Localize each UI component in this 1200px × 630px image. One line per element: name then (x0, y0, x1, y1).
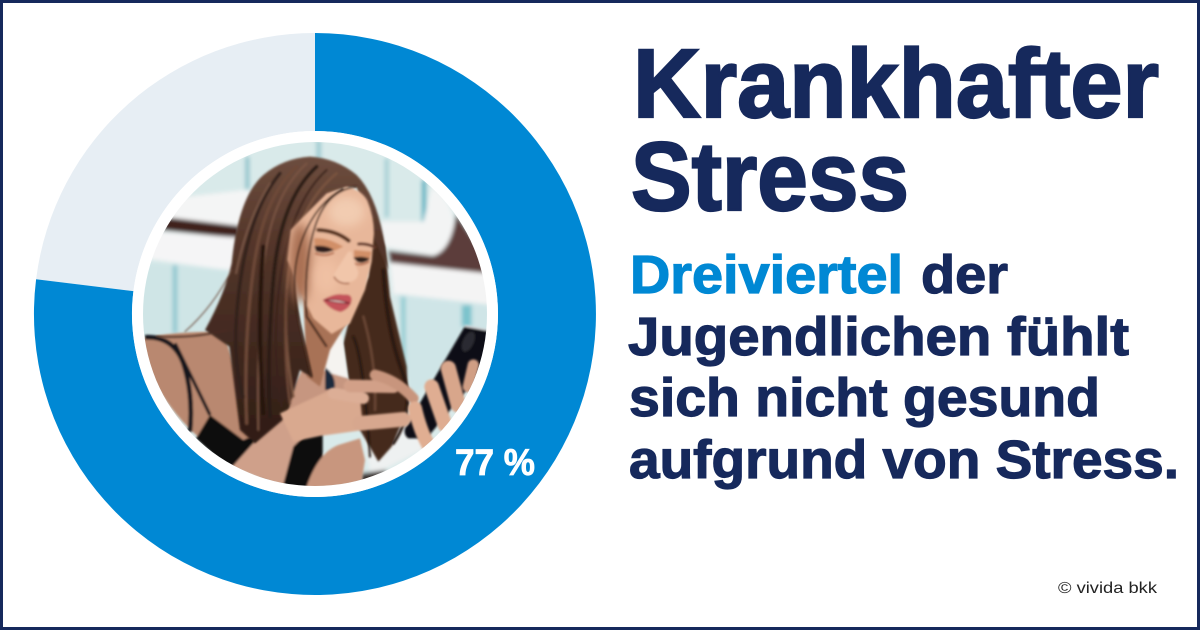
hair mass left and crown (205, 157, 388, 443)
eye shadows (314, 238, 372, 260)
cheek light (310, 268, 330, 284)
fingers of the phone hand (415, 408, 428, 445)
black top (196, 415, 323, 492)
strands across the face (294, 187, 357, 377)
left eye (314, 246, 334, 253)
blue strap (325, 367, 335, 390)
donut chart: 77 percent (34, 33, 596, 595)
title line 2: Stress (631, 122, 909, 231)
bra straps (145, 337, 191, 432)
shoulder (143, 332, 257, 440)
line 3: sich nicht gesund (629, 368, 1100, 428)
under-eye colour (315, 253, 369, 265)
face (287, 187, 375, 377)
highlighted word: Dreiviertel (630, 245, 903, 305)
mouth opening (324, 300, 350, 303)
neck shadow (303, 297, 347, 387)
line 4: aufgrund von Stress. (629, 430, 1179, 490)
left eyebrow (318, 230, 349, 241)
nostril shadow (334, 277, 349, 284)
donut segment: 77 percent (34, 33, 596, 595)
right eyebrow (359, 244, 375, 247)
right eye (353, 257, 370, 263)
forehead light (328, 197, 365, 227)
title line 1: Krankhafter (633, 29, 1159, 138)
nose (333, 252, 358, 283)
photo background: building facade (143, 142, 487, 486)
palm (280, 390, 363, 442)
photo: stressed young woman looking at smartphone (143, 142, 487, 486)
chest (288, 370, 349, 410)
line 2: Jugendlichen fühlt (628, 307, 1129, 367)
forearm (232, 422, 304, 484)
face shape (287, 187, 374, 334)
phone camera (460, 330, 476, 353)
line 1 remainder: der (921, 245, 1008, 305)
smartphone (405, 326, 492, 438)
long brown hair (157, 157, 408, 457)
second arm (305, 438, 365, 492)
donut segment: remaining 23 percent (36, 33, 315, 291)
hair falling behind the hand (343, 210, 408, 462)
lips (323, 294, 352, 312)
left cheek shadow (289, 223, 311, 303)
white collar (310, 333, 348, 383)
woman: shoulders, top and arms (143, 332, 365, 492)
hair strands (157, 163, 408, 457)
body statement (628, 245, 1179, 490)
percentage label: 77 % (455, 442, 535, 483)
title (631, 29, 1159, 231)
white ring around photo (132, 131, 498, 497)
copyright note: © vivida bkk (1058, 580, 1158, 597)
fingers of the typing hand (333, 393, 363, 398)
hands and fingers (280, 365, 473, 445)
